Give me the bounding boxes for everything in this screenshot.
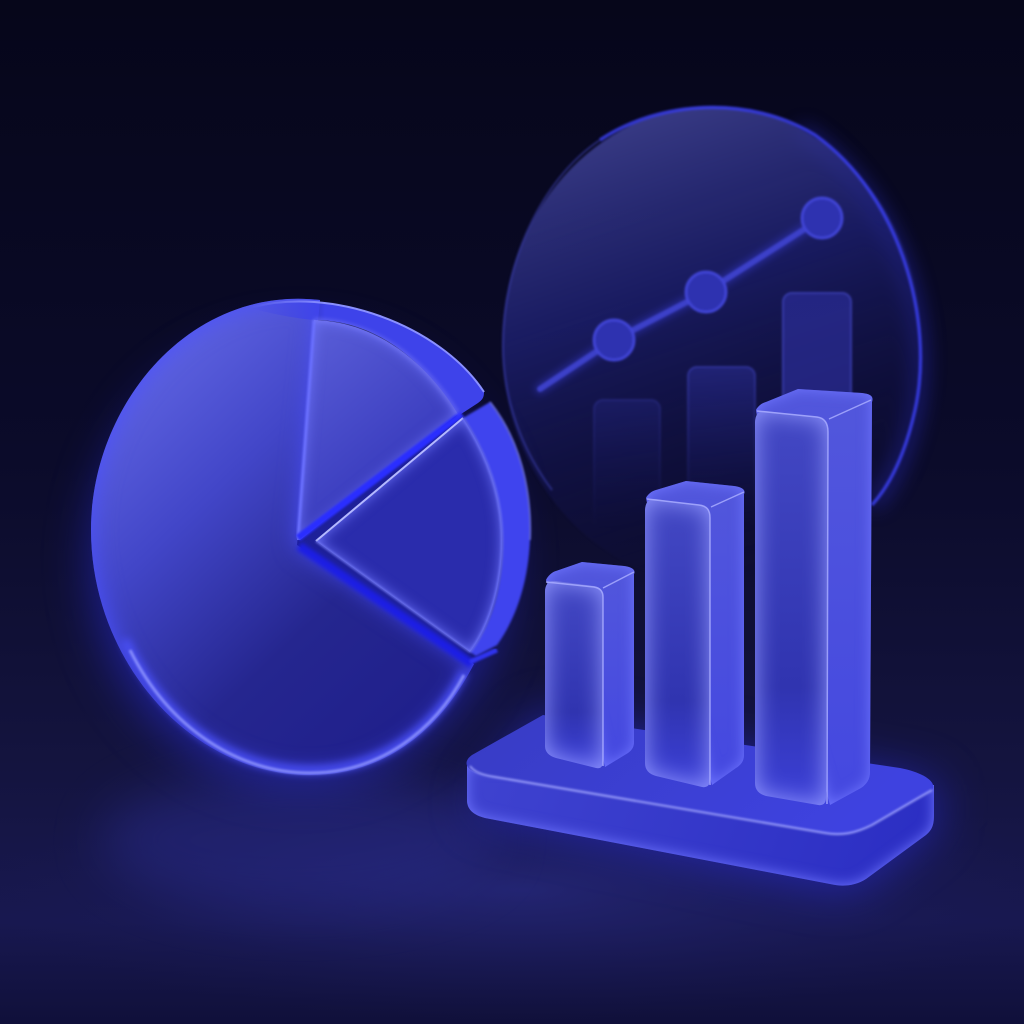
right slice face: [316, 418, 502, 652]
pie glow: [95, 340, 505, 780]
disc body: [502, 107, 922, 583]
upper slice face: [297, 320, 458, 540]
base side: [467, 765, 934, 886]
medium bar: [645, 481, 745, 787]
disc rim: [600, 107, 920, 505]
base front highlight: [470, 766, 932, 834]
upper slice edges: [298, 320, 314, 538]
pie face rim shine: [130, 650, 464, 773]
trend line: [540, 198, 842, 389]
tall bar: [755, 389, 873, 805]
base slab: [467, 715, 934, 886]
short bar: [545, 562, 635, 768]
floor reflection under pie: [100, 770, 500, 910]
right slice highlights: [316, 418, 463, 541]
base glow: [470, 715, 935, 890]
pie seam: [299, 546, 472, 664]
pie main face: [91, 299, 474, 775]
panel: translucent line chart disc: [502, 107, 922, 583]
ghost bars: [594, 293, 851, 530]
panel: glass pie chart: [91, 299, 530, 780]
floor glow: [0, 760, 1024, 1020]
upper slice band: [250, 301, 484, 416]
pie bottom rim glow: [125, 640, 464, 770]
right slice band: [463, 402, 530, 656]
base top: [467, 715, 933, 834]
panel: 3D bar chart on base: [467, 389, 935, 890]
disc glow: [800, 130, 920, 505]
